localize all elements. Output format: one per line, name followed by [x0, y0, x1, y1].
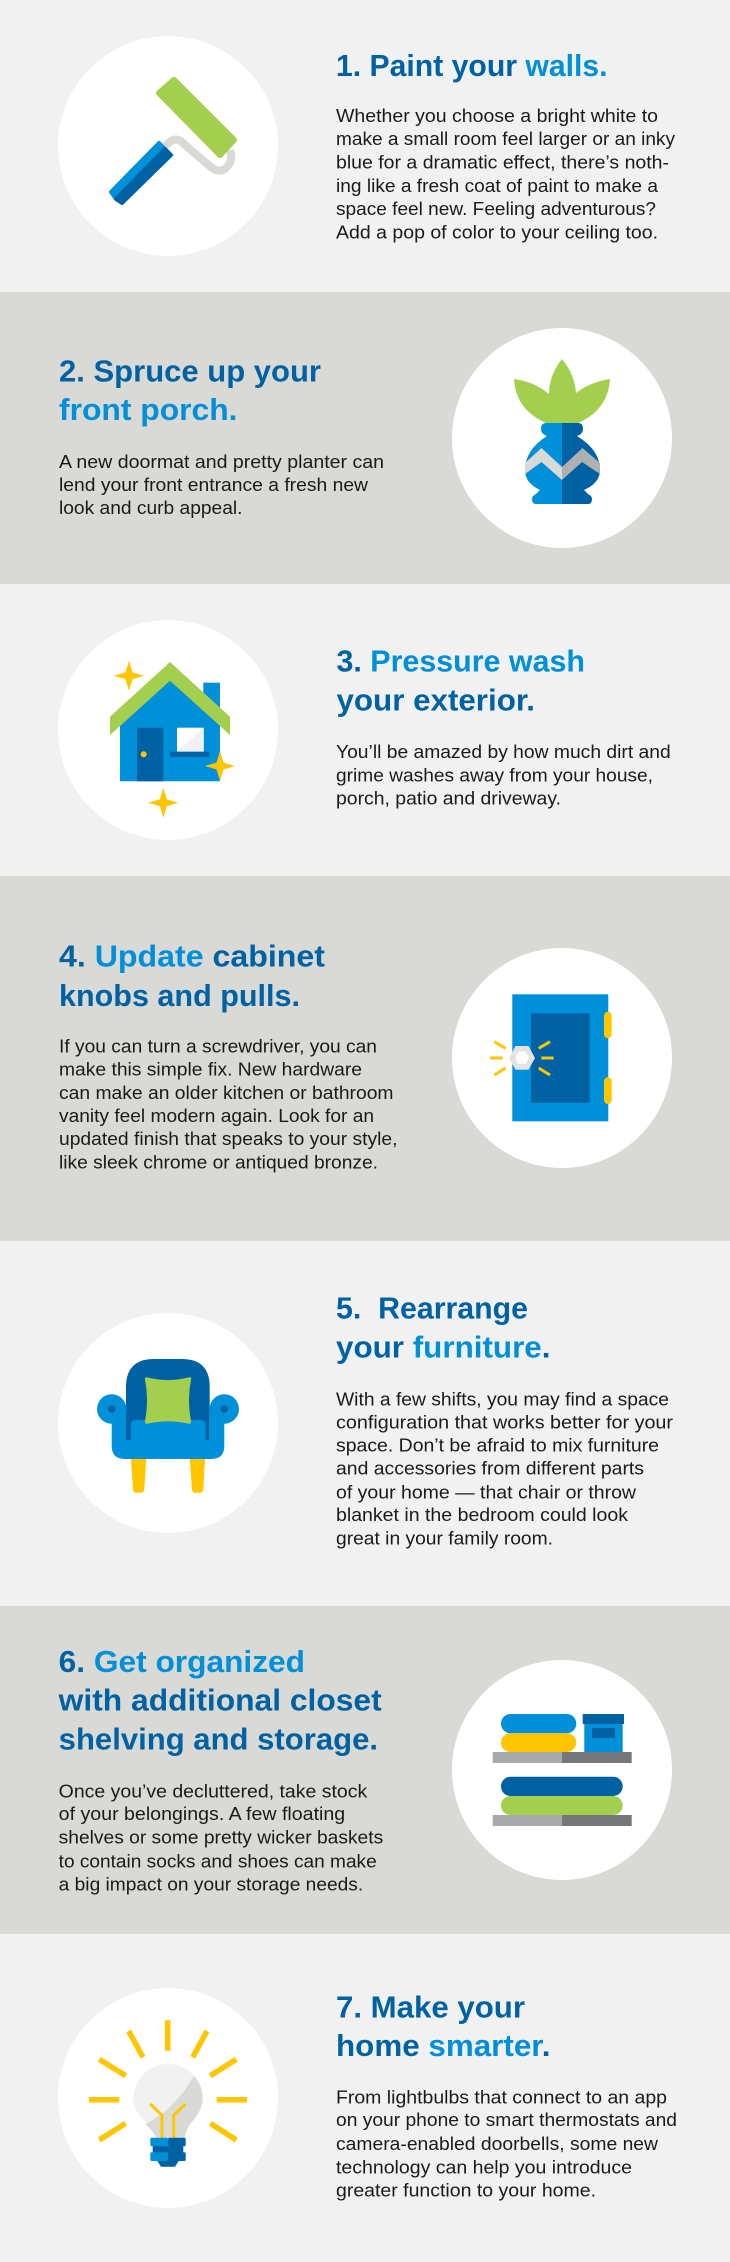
- text block: knobs: make this simple fix. New hardware: [59, 1058, 362, 1080]
- panel: 3 pressure wash your exterior: [0, 584, 730, 876]
- heading: pressure wash: [336, 643, 585, 718]
- text block: storage: of your belongings. A few floating: [59, 1803, 345, 1824]
- text block: wash: porch, patio and driveway.: [336, 788, 561, 809]
- text block: smarter: technology can help you introduce: [336, 2156, 632, 2177]
- heading: spruce up: [59, 354, 321, 427]
- heading: make your home smarter: 7. Make your: [336, 1989, 525, 2024]
- text block: paint: [336, 105, 676, 242]
- panel: 4 update cabinet knobs and pulls: [0, 876, 730, 1241]
- text block: knobs: can make an older kitchen or bathroom: [59, 1082, 394, 1103]
- heading: get organized: 6. Get organized: [59, 1644, 305, 1679]
- text block: knobs: [59, 1036, 398, 1173]
- text block: storage: to contain socks and shoes can make: [59, 1850, 377, 1871]
- heading: update cabinet: knobs and pulls.: [59, 978, 300, 1013]
- heading: get organized: shelving and storage.: [59, 1721, 378, 1756]
- text block: paint: space feel new. Feeling adventurous?: [336, 198, 656, 219]
- text block: wash: grime washes away from your house,: [336, 764, 653, 786]
- icon: cabinet door with knob: [452, 948, 672, 1168]
- panel: 5 rearrange your furniture: [0, 1241, 730, 1606]
- text block: porch: look and curb appeal.: [59, 497, 242, 518]
- icon: light bulb: [58, 1988, 278, 2208]
- heading: update cabinet: 4. Update cabinet: [59, 939, 325, 974]
- heading: make your home smarter: [336, 1989, 550, 2063]
- text block: paint: Add a pop of color to your ceiling too.: [336, 222, 658, 242]
- text block: furniture: great in your family room.: [336, 1527, 553, 1548]
- text block: furniture: of your home — that chair or throw: [336, 1481, 637, 1502]
- text block: paint: make a small room feel larger or an inky: [336, 128, 676, 149]
- text block: furniture: [336, 1388, 673, 1548]
- icon: clean house: [58, 620, 278, 840]
- heading: rearrange: [336, 1291, 550, 1364]
- text block: furniture: and accessories from different parts: [336, 1457, 644, 1478]
- text block: furniture: With a few shifts, you may find a space: [336, 1388, 669, 1409]
- text block: knobs: like sleek chrome or antiqued bronze.: [59, 1152, 378, 1173]
- text block: porch: lend your front entrance a fresh new: [59, 474, 369, 495]
- text block: furniture: configuration that works better for your: [336, 1411, 673, 1432]
- text block: knobs: If you can turn a screwdriver, you can: [59, 1036, 377, 1057]
- text block: wash: You’ll be amazed by how much dirt and: [336, 741, 671, 762]
- heading: get organized: with additional closet: [58, 1683, 382, 1718]
- text block: wash: [336, 741, 671, 809]
- text block: storage: shelves or some pretty wicker baskets: [59, 1826, 383, 1847]
- text block: smarter: camera-enabled doorbells, some new: [336, 2133, 659, 2154]
- heading: rearrange: your furniture.: [336, 1329, 550, 1364]
- text block: knobs: vanity feel modern again. Look for an: [59, 1105, 374, 1126]
- text block: smarter: [336, 2086, 677, 2201]
- text block: porch: A new doormat and pretty planter can: [59, 451, 384, 472]
- heading: spruce up: 2. Spruce up your: [59, 354, 321, 388]
- panel: 7 make your home smarter: [0, 1934, 730, 2262]
- icon: planter: [452, 328, 672, 548]
- panel: 6 get organized: [0, 1606, 730, 1934]
- text block: porch: [59, 451, 384, 518]
- text block: smarter: From lightbulbs that connect to an app: [336, 2086, 667, 2107]
- text block: smarter: greater function to your home.: [336, 2180, 596, 2201]
- icon: closet shelves: [452, 1660, 672, 1880]
- heading: pressure wash: 3. Pressure wash: [336, 643, 585, 678]
- panel: 1 paint your walls: [0, 0, 730, 292]
- text block: knobs: updated finish that speaks to your style,: [59, 1128, 398, 1149]
- panel: 2 spruce up your front porch: [0, 292, 730, 584]
- heading: get organized: [58, 1644, 382, 1756]
- text block: furniture: space. Don’t be afraid to mix furniture: [336, 1435, 659, 1456]
- text block: paint: blue for a dramatic effect, there’s noth-: [336, 152, 669, 172]
- heading: make your home smarter: home smarter.: [336, 2028, 550, 2063]
- heading: paint your walls: 1. Paint your walls.: [336, 48, 608, 83]
- icon: armchair: [58, 1313, 278, 1533]
- text block: storage: Once you’ve decluttered, take stock: [59, 1780, 368, 1801]
- heading: rearrange: 5. Rearrange: [336, 1291, 528, 1326]
- text block: paint: ing like a fresh coat of paint to make a: [336, 175, 659, 196]
- text block: furniture: blanket in the bedroom could look: [336, 1504, 629, 1525]
- text block: storage: a big impact on your storage needs.: [59, 1874, 363, 1895]
- text block: smarter: on your phone to smart thermostats and: [336, 2109, 677, 2130]
- text block: paint: Whether you choose a bright white to: [336, 105, 658, 126]
- heading: spruce up: front porch.: [59, 392, 238, 427]
- heading: update cabinet: [59, 939, 325, 1013]
- icon: paint roller: [58, 36, 278, 256]
- heading: pressure wash: your exterior.: [336, 683, 535, 718]
- text block: storage: [59, 1780, 383, 1895]
